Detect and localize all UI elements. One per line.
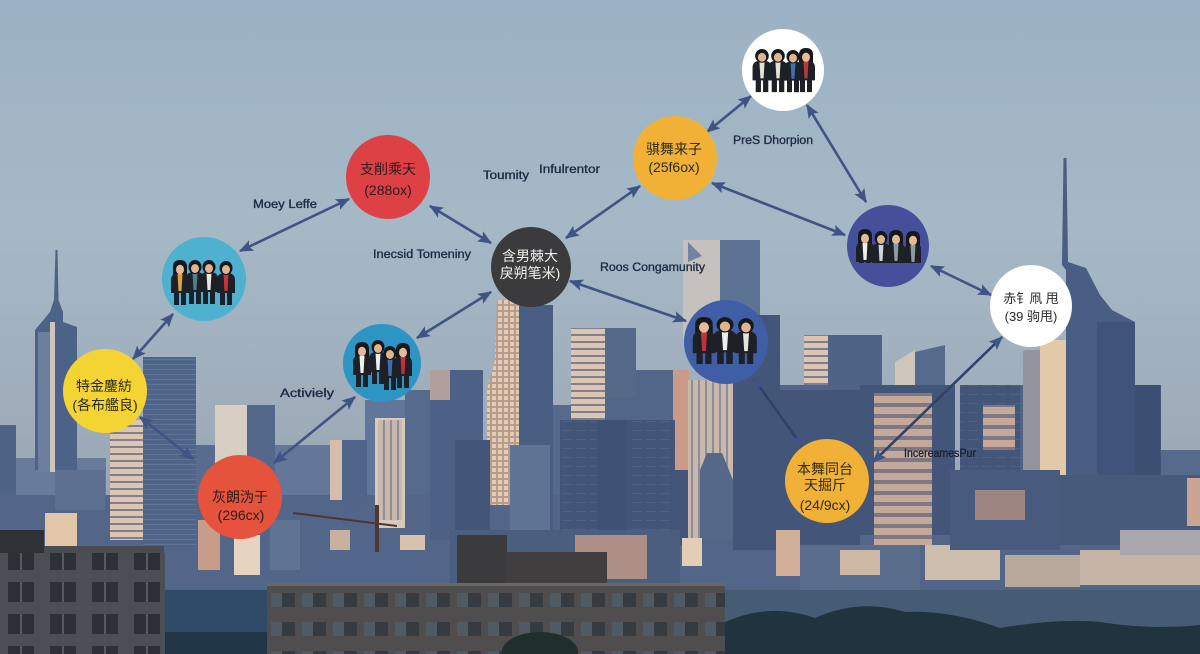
striped towers bbox=[378, 380, 1015, 545]
node: orange bbox=[633, 116, 717, 200]
node: red-orange bbox=[198, 455, 282, 539]
node: white right bbox=[990, 265, 1072, 347]
mid buildings bbox=[110, 240, 945, 547]
node: blue-teal people bbox=[343, 324, 421, 402]
distant trees bbox=[165, 590, 1200, 654]
label: Pres Dhorpion: PreS Dhorpion bbox=[733, 135, 813, 147]
node: white right: (39 驹甩) bbox=[1005, 309, 1057, 324]
near blue buildings bbox=[455, 315, 1161, 550]
node: blue people bbox=[684, 300, 768, 384]
node: yellow bbox=[63, 349, 147, 433]
node: yellow: (各布艦良) bbox=[72, 397, 138, 413]
node: red-orange: 灰朗沩于 bbox=[212, 489, 268, 505]
foreground building center bbox=[267, 535, 725, 654]
node: white right: 赤钅凧 甩 bbox=[1003, 291, 1059, 306]
node: orange: (25f6ox) bbox=[648, 159, 700, 175]
city skyline bbox=[0, 158, 1200, 654]
label: Toumity: Toumity bbox=[483, 170, 529, 182]
node: red: 支削乘天 bbox=[360, 161, 416, 177]
label: IncereamesPur: IncereamesPur bbox=[904, 448, 976, 460]
label: Activiely: Activiely bbox=[280, 388, 334, 400]
connection arrows bbox=[133, 96, 1002, 463]
node: dark center: 含男棘大 bbox=[502, 248, 558, 264]
node: teal people bbox=[162, 237, 246, 321]
labels bbox=[253, 135, 976, 460]
construction crane bbox=[293, 505, 397, 552]
node: gold bbox=[785, 439, 869, 523]
node: red bbox=[346, 135, 430, 219]
node: top white people bbox=[742, 29, 824, 111]
node: dark center bbox=[491, 227, 571, 307]
node: gold: 天掘斤 bbox=[804, 477, 846, 493]
base haze band bbox=[0, 495, 1200, 595]
label: Moey Leffe: Moey Leffe bbox=[253, 199, 317, 211]
node: dark center: 戾朔笔米) bbox=[500, 265, 560, 281]
node: red-orange: (296cx) bbox=[218, 507, 264, 523]
node: red: (288ox) bbox=[364, 182, 412, 198]
node: gold: (24/9cx) bbox=[800, 497, 850, 513]
node: gold: 本舞同台 bbox=[797, 461, 853, 477]
label: Ross Congamunity: Roos Congamunity bbox=[600, 262, 705, 274]
node: orange: 骐舞来子 bbox=[646, 141, 702, 157]
label: Infulrentor: Infulrentor bbox=[539, 164, 600, 176]
left tower bbox=[35, 250, 105, 510]
right tower with spire bbox=[1023, 158, 1160, 515]
low warm rooftops bbox=[45, 470, 1200, 595]
label: Inecsid Tomeniny: Inecsid Tomeniny bbox=[373, 249, 471, 261]
node: yellow: 特金鏖紡 bbox=[76, 378, 132, 394]
node: navy people bbox=[847, 205, 929, 287]
far buildings bbox=[0, 370, 1200, 558]
foreground building left bbox=[0, 530, 165, 654]
